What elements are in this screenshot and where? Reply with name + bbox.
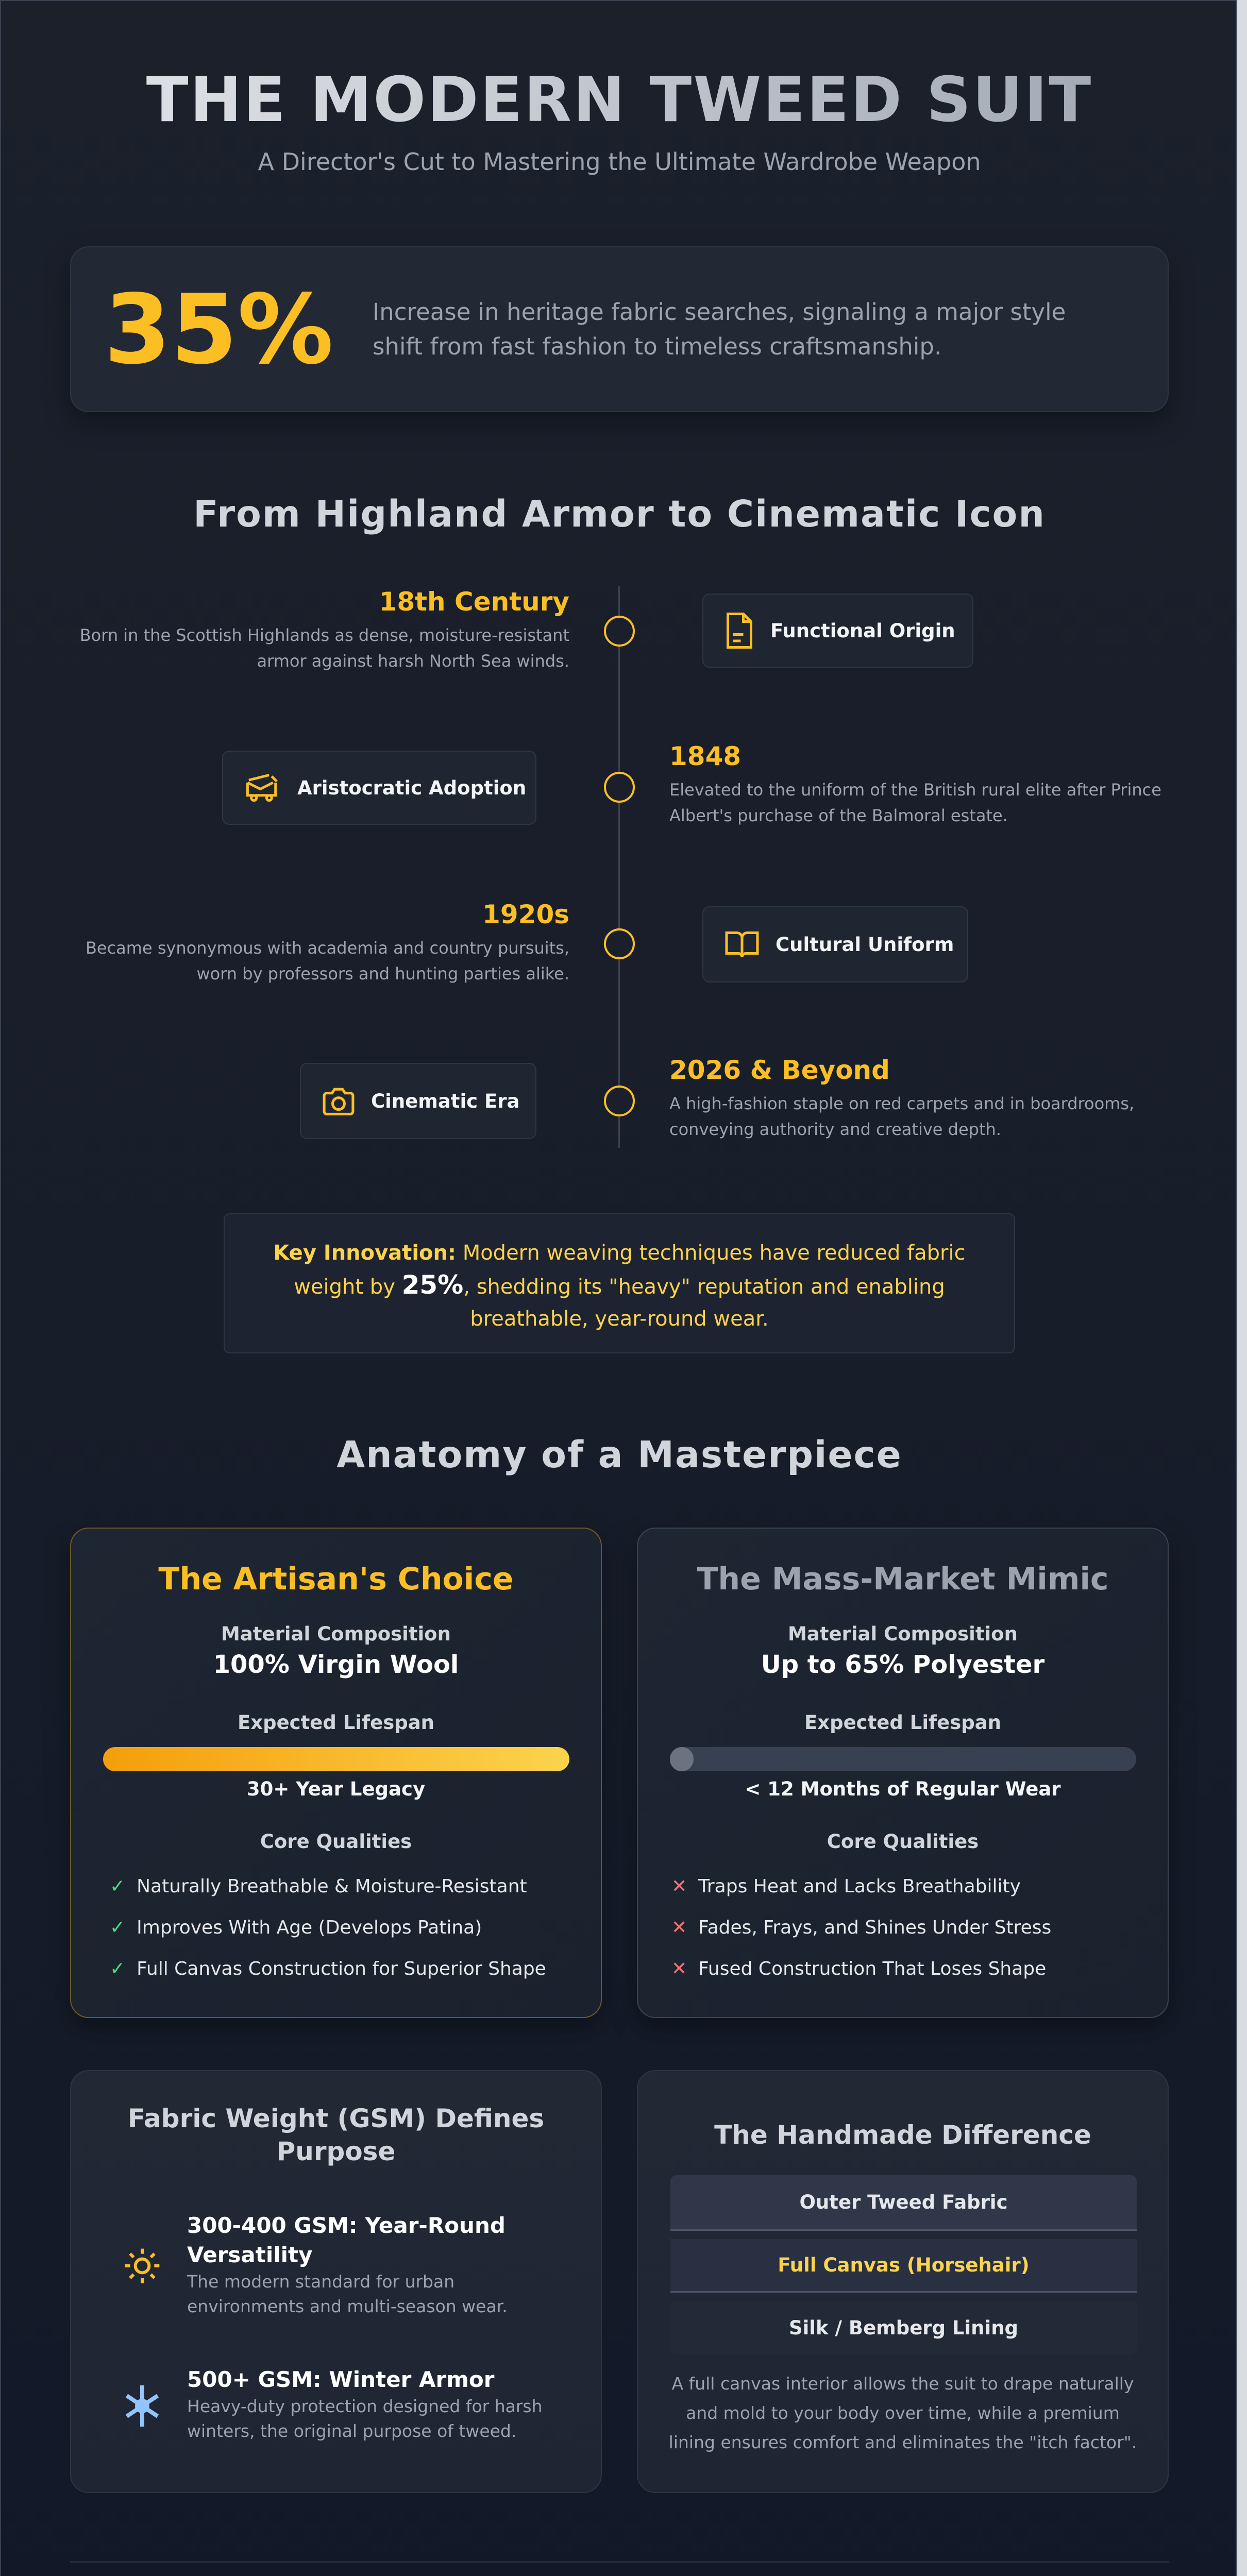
- icon: snowflake: [126, 2385, 159, 2427]
- layer: lining: Silk / Bemberg Lining: [789, 2317, 1018, 2339]
- title: [1, 60, 1238, 140]
- item: 1848: 1848: [669, 741, 741, 771]
- layer: lining: [670, 2301, 1137, 2355]
- lifespan bar: < 12 Months of Regular Wear: [745, 1778, 1061, 1800]
- heading: anatomy: Anatomy of a Masterpiece: [336, 1433, 902, 1476]
- list: cons: [671, 1876, 1051, 1979]
- description: [669, 2374, 1137, 2452]
- lifespan bar: Expected Lifespan: [804, 1711, 1001, 1734]
- description: lining ensures comfort and eliminates the "itch factor".: [669, 2432, 1137, 2452]
- stat description: Increase in heritage fabric searches, signaling a major style shift from fast fashion to timeless craftsmanship.: [373, 298, 1066, 360]
- tag: cultural uniform: [702, 906, 968, 982]
- panel title: The Mass-Market Mimic: [697, 1561, 1109, 1597]
- stat card: [70, 246, 1169, 412]
- item: 1848: [222, 741, 1161, 825]
- material composition: Material Composition: [788, 1623, 1018, 1645]
- item: 300-400 gsm: environments and multi-season wear.: [187, 2296, 508, 2316]
- material composition: [213, 1623, 459, 1679]
- list: pros: [110, 1876, 546, 1979]
- layer: outer: [670, 2175, 1137, 2231]
- material composition: Up to 65% Polyester: [761, 1650, 1044, 1679]
- item: 300-400 gsm: The modern standard for urban: [187, 2272, 454, 2292]
- item: 500+ gsm: winters, the original purpose of tweed.: [187, 2421, 516, 2441]
- list: pros: ✓ Naturally Breathable & Moisture-Resistant: [110, 1876, 527, 1897]
- panel title: [128, 2104, 544, 2166]
- item: 1920s: Became synonymous with academia and country pursuits,: [86, 938, 569, 958]
- timeline: [80, 586, 1161, 1148]
- tag: cultural uniform: Cultural Uniform: [776, 934, 954, 955]
- list: pros: ✓ Full Canvas Construction for Superior Shape: [110, 1958, 546, 1979]
- list: pros: ✓ Improves With Age (Develops Patina): [110, 1917, 482, 1938]
- item: 1920s: 1920s: [482, 900, 569, 929]
- panel: fabric weight: [70, 2070, 602, 2493]
- item: 1920s: [86, 900, 968, 984]
- list: cons: ✕ Fades, Frays, and Shines Under Stress: [671, 1917, 1051, 1938]
- panel: artisan's choice: [70, 1528, 602, 2018]
- item: 18th century: armor against harsh North Sea winds.: [257, 651, 569, 671]
- stat number: 35%: [104, 274, 333, 385]
- panel title: Fabric Weight (GSM) Defines: [128, 2104, 544, 2133]
- item: 2026: [300, 1055, 1134, 1139]
- item: 1848: Albert's purchase of the Balmoral estate.: [669, 806, 1008, 825]
- item: 2026: 2026 & Beyond: [669, 1055, 890, 1085]
- item: 1920s: worn by professors and hunting parties alike.: [196, 964, 569, 984]
- item: 2026: conveying authority and creative depth.: [669, 1120, 1001, 1139]
- callout: key innovation: breathable, year-round wear.: [470, 1307, 769, 1331]
- lifespan bar: Expected Lifespan: [238, 1711, 434, 1734]
- panel title: The Handmade Difference: [714, 2120, 1091, 2150]
- subtitle: A Director's Cut to Mastering the Ultimate Wardrobe Weapon: [258, 148, 981, 176]
- lifespan bar: 30+ Year Legacy: [247, 1778, 425, 1800]
- tag: cinematic era: [300, 1063, 536, 1139]
- material composition: 100% Virgin Wool: [213, 1650, 459, 1679]
- panel: handmade difference: [637, 2070, 1169, 2493]
- callout: key innovation: [224, 1213, 1015, 1353]
- panel: mass-market mimic: [637, 1528, 1169, 2018]
- description: A full canvas interior allows the suit to drape naturally: [672, 2374, 1134, 2394]
- heading: timeline: From Highland Armor to Cinematic Icon: [193, 493, 1046, 535]
- icon: sun: [125, 2248, 160, 2283]
- title: THE MODERN TWEED SUIT: [146, 64, 1092, 136]
- item: 300-400 gsm: 300-400 GSM: Year-Round: [187, 2213, 505, 2238]
- item: 500+ gsm: Heavy-duty protection designed for harsh: [187, 2396, 543, 2416]
- tag: cinematic era: Cinematic Era: [371, 1090, 519, 1112]
- item: 18th century: [80, 587, 973, 671]
- callout: key innovation: Key Innovation: Modern weaving techniques have reduced fabric: [273, 1241, 966, 1265]
- description: and mold to your body over time, while a premium: [686, 2403, 1120, 2423]
- panel title: Purpose: [277, 2137, 395, 2166]
- item: 18th century: Born in the Scottish Highlands as dense, moisture-resistant: [80, 625, 569, 645]
- tag: aristocratic adoption: Aristocratic Adoption: [297, 777, 526, 799]
- layer diagram: [670, 2175, 1137, 2339]
- list: cons: ✕ Fused Construction That Loses Shape: [671, 1958, 1046, 1979]
- callout: key innovation: weight by 25%, shedding its "heavy" reputation and enabling: [294, 1270, 945, 1300]
- material composition: Material Composition: [221, 1623, 451, 1645]
- core qualities: Core Qualities: [260, 1831, 412, 1853]
- lifespan bar: [670, 1711, 1136, 1800]
- panel title: The Artisan's Choice: [158, 1561, 514, 1597]
- item: 300-400 gsm: Versatility: [187, 2242, 312, 2267]
- layer: canvas: [670, 2239, 1137, 2293]
- layer: outer: Outer Tweed Fabric: [799, 2191, 1008, 2213]
- item: 18th century: 18th Century: [379, 587, 569, 617]
- list: cons: ✕ Traps Heat and Lacks Breathability: [671, 1876, 1021, 1897]
- core qualities: Core Qualities: [827, 1831, 979, 1853]
- material composition: [761, 1623, 1045, 1679]
- tag: functional origin: Functional Origin: [770, 619, 955, 642]
- tag: aristocratic adoption: [222, 751, 536, 825]
- item: 300-400 gsm: [125, 2213, 508, 2316]
- lifespan bar: [103, 1711, 569, 1800]
- item: 1848: Elevated to the uniform of the British rural elite after Prince: [669, 780, 1161, 800]
- item: 2026: A high-fashion staple on red carpets and in boardrooms,: [669, 1094, 1134, 1113]
- item: 500+ gsm: [126, 2367, 543, 2441]
- item: 500+ gsm: 500+ GSM: Winter Armor: [187, 2367, 495, 2392]
- tag: functional origin: [702, 594, 973, 668]
- layer: canvas: Full Canvas (Horsehair): [778, 2254, 1030, 2276]
